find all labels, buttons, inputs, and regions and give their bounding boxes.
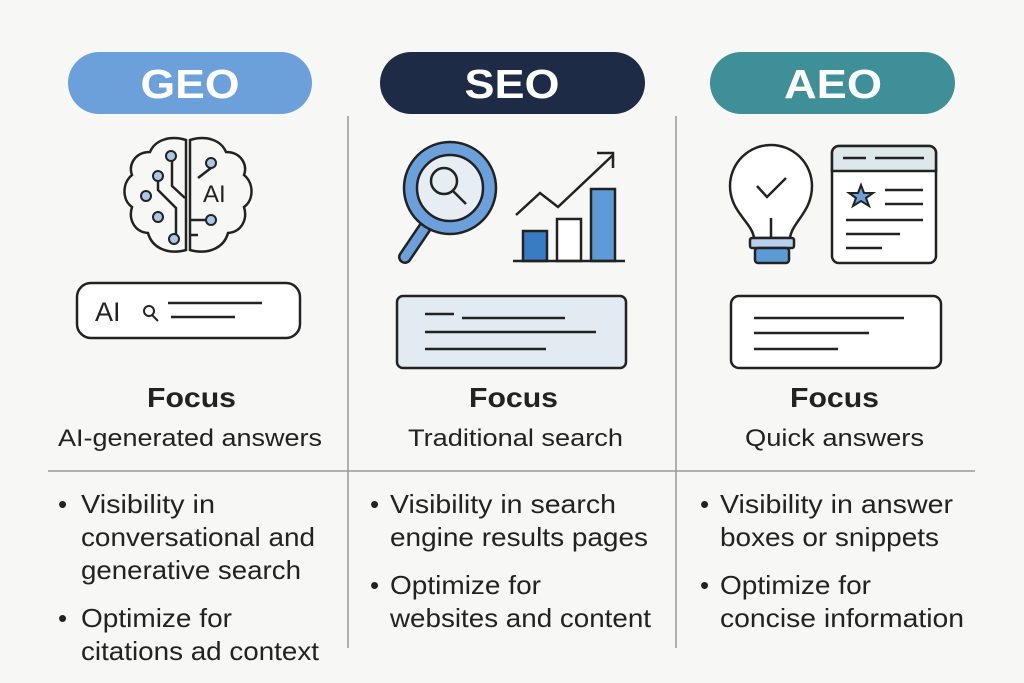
text: AEO focus bbox=[745, 382, 924, 452]
icon: lightbulb bbox=[730, 145, 812, 263]
pill: GEO bbox=[68, 52, 312, 114]
text: GEO focus bbox=[58, 382, 322, 452]
pill: SEO bbox=[380, 52, 645, 114]
bullets: SEO: engine results pages bbox=[390, 522, 648, 552]
bullets: GEO: Optimize for bbox=[81, 603, 232, 633]
icon: AI search bar bbox=[77, 283, 300, 338]
icon: answer box bbox=[731, 296, 941, 368]
bullets: AEO: • bbox=[700, 489, 709, 519]
bullets: SEO: Optimize for bbox=[390, 570, 541, 600]
text: SEO focus bbox=[408, 382, 623, 452]
icon: AI brain: AI bbox=[203, 181, 226, 208]
text: AEO focus: Quick answers bbox=[745, 425, 924, 452]
bullets: SEO: • bbox=[370, 489, 379, 519]
bullets: SEO: • bbox=[370, 570, 379, 600]
pill: GEO: GEO bbox=[140, 61, 240, 107]
icon: snippet card bbox=[832, 146, 936, 263]
text: GEO focus: AI-generated answers bbox=[58, 425, 322, 452]
icon: AI brain bbox=[124, 138, 252, 252]
pill: SEO: SEO bbox=[464, 61, 560, 107]
bullets: GEO: generative search bbox=[81, 555, 301, 585]
text: SEO focus: Focus bbox=[469, 382, 558, 413]
bullets: AEO: boxes or snippets bbox=[720, 522, 939, 552]
bullets: SEO: websites and content bbox=[389, 603, 652, 633]
icon: growth chart bbox=[513, 153, 625, 261]
text: SEO focus: Traditional search bbox=[408, 425, 623, 452]
icon: AI search bar: AI bbox=[95, 297, 121, 327]
icon: magnifier bbox=[404, 142, 496, 257]
pill: AEO: AEO bbox=[784, 61, 882, 107]
bullets: AEO bbox=[700, 489, 964, 633]
bullets: AEO: Optimize for bbox=[720, 570, 871, 600]
bullets: SEO: Visibility in search bbox=[390, 489, 616, 519]
bullets: GEO bbox=[58, 489, 320, 666]
bullets: AEO: • bbox=[700, 570, 709, 600]
bullets: GEO: • bbox=[58, 489, 67, 519]
bullets: GEO: citations ad context bbox=[81, 636, 320, 666]
bullets: GEO: • bbox=[58, 603, 67, 633]
bullets: AEO: Visibility in answer bbox=[720, 489, 953, 519]
bullets: GEO: Visibility in bbox=[81, 489, 215, 519]
pill: AEO bbox=[710, 52, 955, 114]
bullets: SEO bbox=[370, 489, 652, 633]
text: AEO focus: Focus bbox=[790, 382, 879, 413]
bullets: GEO: conversational and bbox=[81, 522, 315, 552]
text: GEO focus: Focus bbox=[147, 382, 236, 413]
bullets: AEO: concise information bbox=[720, 603, 964, 633]
icon: results box bbox=[397, 296, 626, 368]
